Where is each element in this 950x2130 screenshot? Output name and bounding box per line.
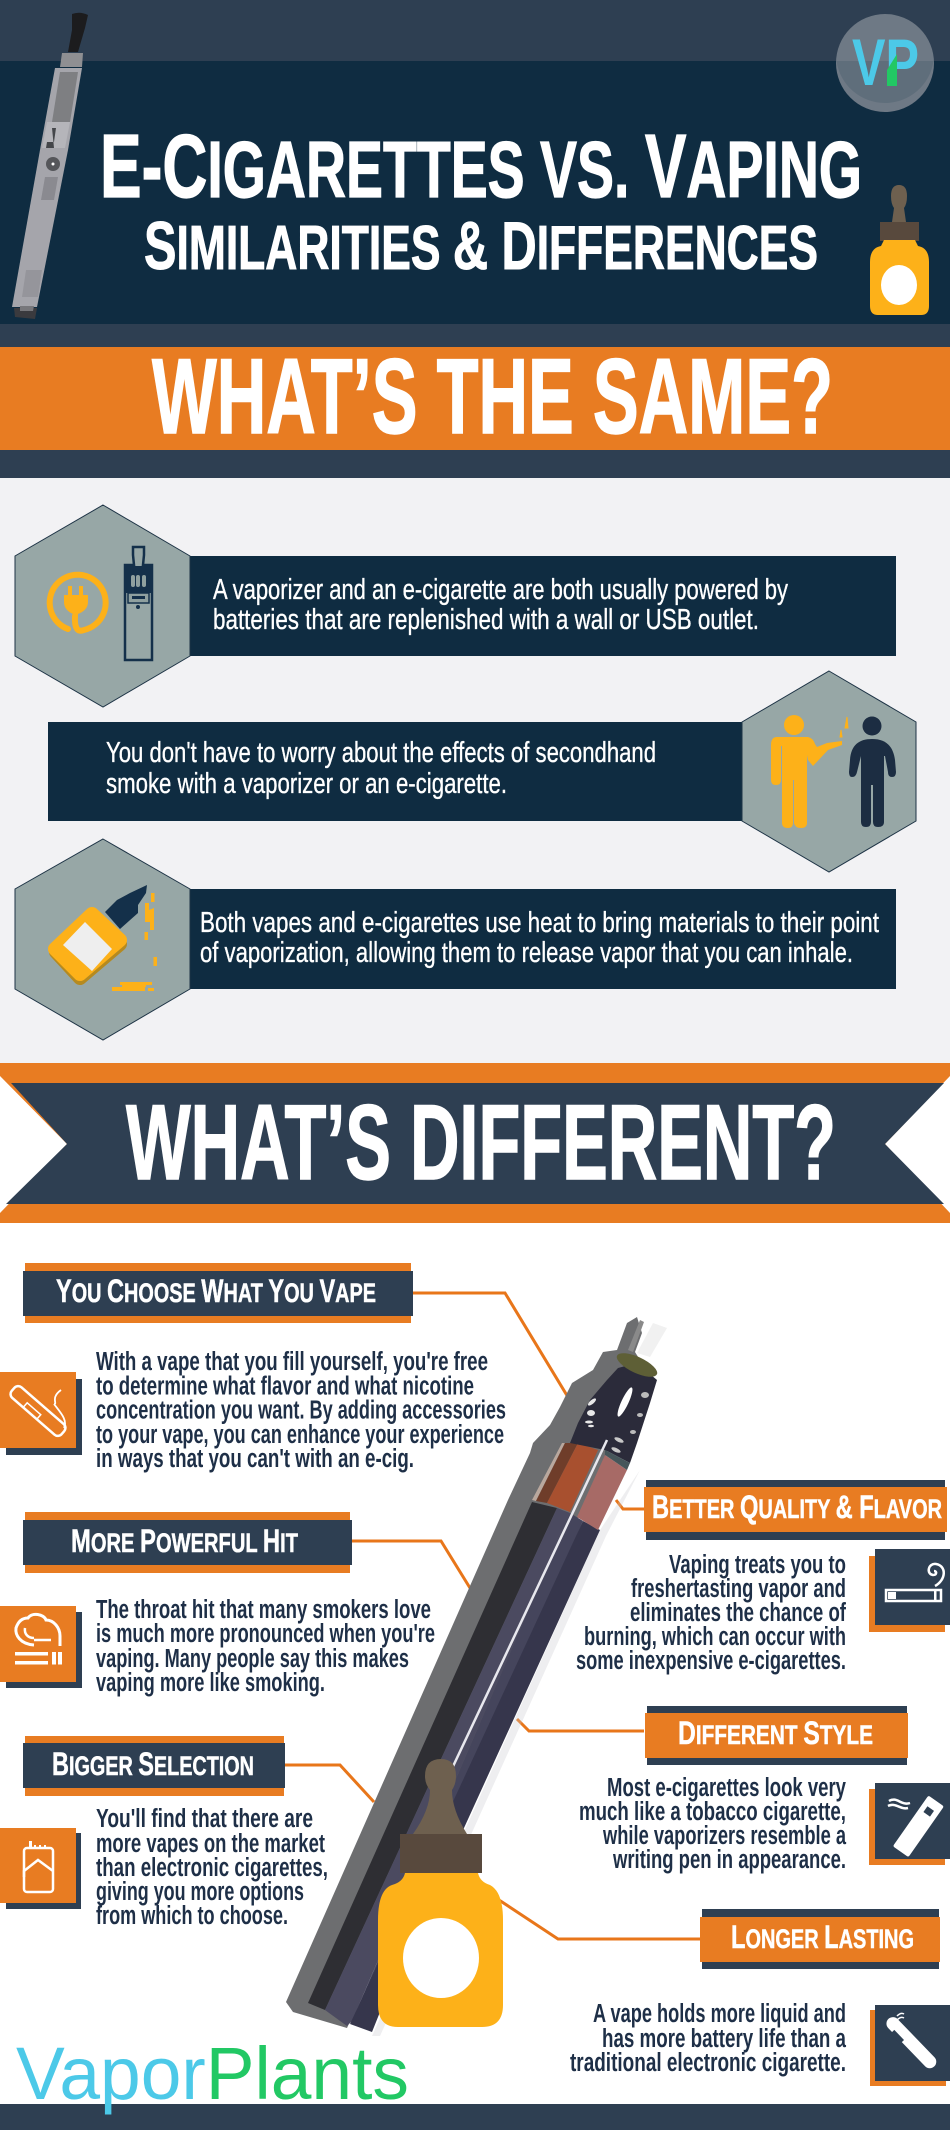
icon: e-cigarette with smoke bbox=[0, 1372, 82, 1455]
panel: similarities background bbox=[0, 478, 950, 1063]
heading bbox=[700, 1909, 940, 1969]
heading: BIGGER SELECTION bbox=[52, 1746, 254, 1782]
panel text bbox=[200, 907, 879, 969]
title: E-CIGARETTES VS. VAPING bbox=[100, 117, 862, 217]
hexagon icon: two people bbox=[742, 671, 916, 872]
body text: concentration you want. By adding accessories bbox=[96, 1396, 506, 1424]
connector lines bbox=[285, 1293, 700, 1939]
item: longer lasting bbox=[570, 1909, 950, 2086]
body text: You'll find that there are bbox=[96, 1805, 313, 1833]
header band bbox=[0, 0, 950, 478]
body text: writing pen in appearance. bbox=[612, 1846, 846, 1874]
body text: to your vape, you can enhance your experience bbox=[96, 1421, 504, 1449]
icon: small e-liquid bottle bbox=[870, 185, 929, 315]
icon: stick e-cigarette bbox=[870, 2005, 950, 2086]
body text: A vape holds more liquid and bbox=[593, 2000, 846, 2028]
panel text: batteries that are replenished with a wall or USB outlet. bbox=[213, 604, 759, 636]
icon: cigarette and smoke cloud bbox=[0, 1606, 82, 1688]
icon: cigarette pack bbox=[0, 1828, 81, 1909]
body text bbox=[96, 1348, 506, 1473]
illustration: large vape pen bbox=[286, 1317, 667, 2036]
logo badge: VP: VP bbox=[852, 25, 919, 99]
body text: With a vape that you fill yourself, you're free bbox=[96, 1348, 488, 1376]
panel: powered by batteries bbox=[15, 505, 896, 707]
body text: in ways that you can't with an e-cig. bbox=[96, 1445, 414, 1473]
body text: burning, which can occur with bbox=[584, 1623, 846, 1651]
panel text bbox=[106, 737, 656, 800]
body text: much like a tobacco cigarette, bbox=[579, 1798, 846, 1826]
heading bbox=[23, 1736, 285, 1796]
hexagon icon: tilted e-liquid bottle bbox=[15, 839, 190, 1040]
heading bbox=[23, 1512, 352, 1573]
footer bar bbox=[0, 2104, 950, 2130]
body text bbox=[579, 1774, 847, 1874]
icon: pen style vape bbox=[869, 1783, 950, 1865]
section heading: what's different banner bbox=[0, 1063, 950, 1223]
body text: than electronic cigarettes, bbox=[96, 1854, 328, 1882]
icon: slim vaporizer pen bbox=[12, 13, 88, 319]
icon: cigarette with swirl bbox=[869, 1549, 950, 1632]
heading: YOU CHOOSE WHAT YOU VAPE bbox=[56, 1273, 376, 1309]
panel: heat and vaporization bbox=[15, 839, 896, 1040]
body text: more vapes on the market bbox=[96, 1830, 325, 1858]
body text: Vaping treats you to bbox=[669, 1551, 846, 1579]
heading: LONGER LASTING bbox=[731, 1919, 914, 1955]
title bbox=[100, 117, 862, 284]
heading: DIFFERENT STYLE bbox=[678, 1715, 873, 1751]
item: you choose what you vape bbox=[0, 1263, 506, 1473]
body text bbox=[96, 1596, 435, 1697]
item: bigger selection bbox=[0, 1736, 328, 1930]
body text: from which to choose. bbox=[96, 1902, 288, 1930]
body text: giving you more options bbox=[96, 1878, 304, 1906]
body text: some inexpensive e-cigarettes. bbox=[576, 1647, 846, 1675]
panel: secondhand smoke bbox=[48, 671, 916, 872]
panel text: You don't have to worry about the effects of secondhand bbox=[106, 737, 656, 769]
body text: while vaporizers resemble a bbox=[602, 1822, 847, 1850]
brand wordmark: VaporPlants bbox=[16, 2032, 409, 2115]
body text bbox=[570, 2000, 847, 2077]
heading bbox=[644, 1480, 947, 1540]
logo badge: VP bbox=[836, 14, 934, 112]
body text: is much more pronounced when you're bbox=[96, 1620, 435, 1648]
body text: freshertasting vapor and bbox=[631, 1575, 846, 1603]
body text: Most e-cigarettes look very bbox=[607, 1774, 847, 1802]
body text: vaping more like smoking. bbox=[96, 1669, 325, 1697]
body text: eliminates the chance of bbox=[630, 1599, 846, 1627]
item: different style bbox=[579, 1706, 950, 1874]
heading bbox=[23, 1263, 413, 1323]
item: more powerful hit bbox=[0, 1512, 435, 1697]
heading bbox=[645, 1706, 908, 1765]
body text bbox=[96, 1805, 328, 1930]
body text: has more battery life than a bbox=[602, 2025, 847, 2053]
body text: to determine what flavor and what nicotine bbox=[96, 1372, 474, 1400]
panel text: A vaporizer and an e-cigarette are both usually powered by bbox=[213, 574, 788, 606]
hexagon icon: plug and vape bbox=[15, 505, 190, 707]
body text: vaping. Many people say this makes bbox=[96, 1645, 409, 1673]
illustration: large e-liquid bottle bbox=[378, 1759, 503, 2027]
body text bbox=[576, 1551, 846, 1675]
title: SIMILARITIES & DIFFERENCES bbox=[144, 208, 818, 284]
panel text: smoke with a vaporizer or an e-cigarette. bbox=[106, 768, 507, 800]
body text: The throat hit that many smokers love bbox=[96, 1596, 431, 1624]
panel text bbox=[213, 574, 788, 636]
heading: MORE POWERFUL HIT bbox=[71, 1523, 298, 1559]
body text: traditional electronic cigarette. bbox=[570, 2049, 846, 2077]
item: better quality and flavor bbox=[576, 1480, 950, 1675]
